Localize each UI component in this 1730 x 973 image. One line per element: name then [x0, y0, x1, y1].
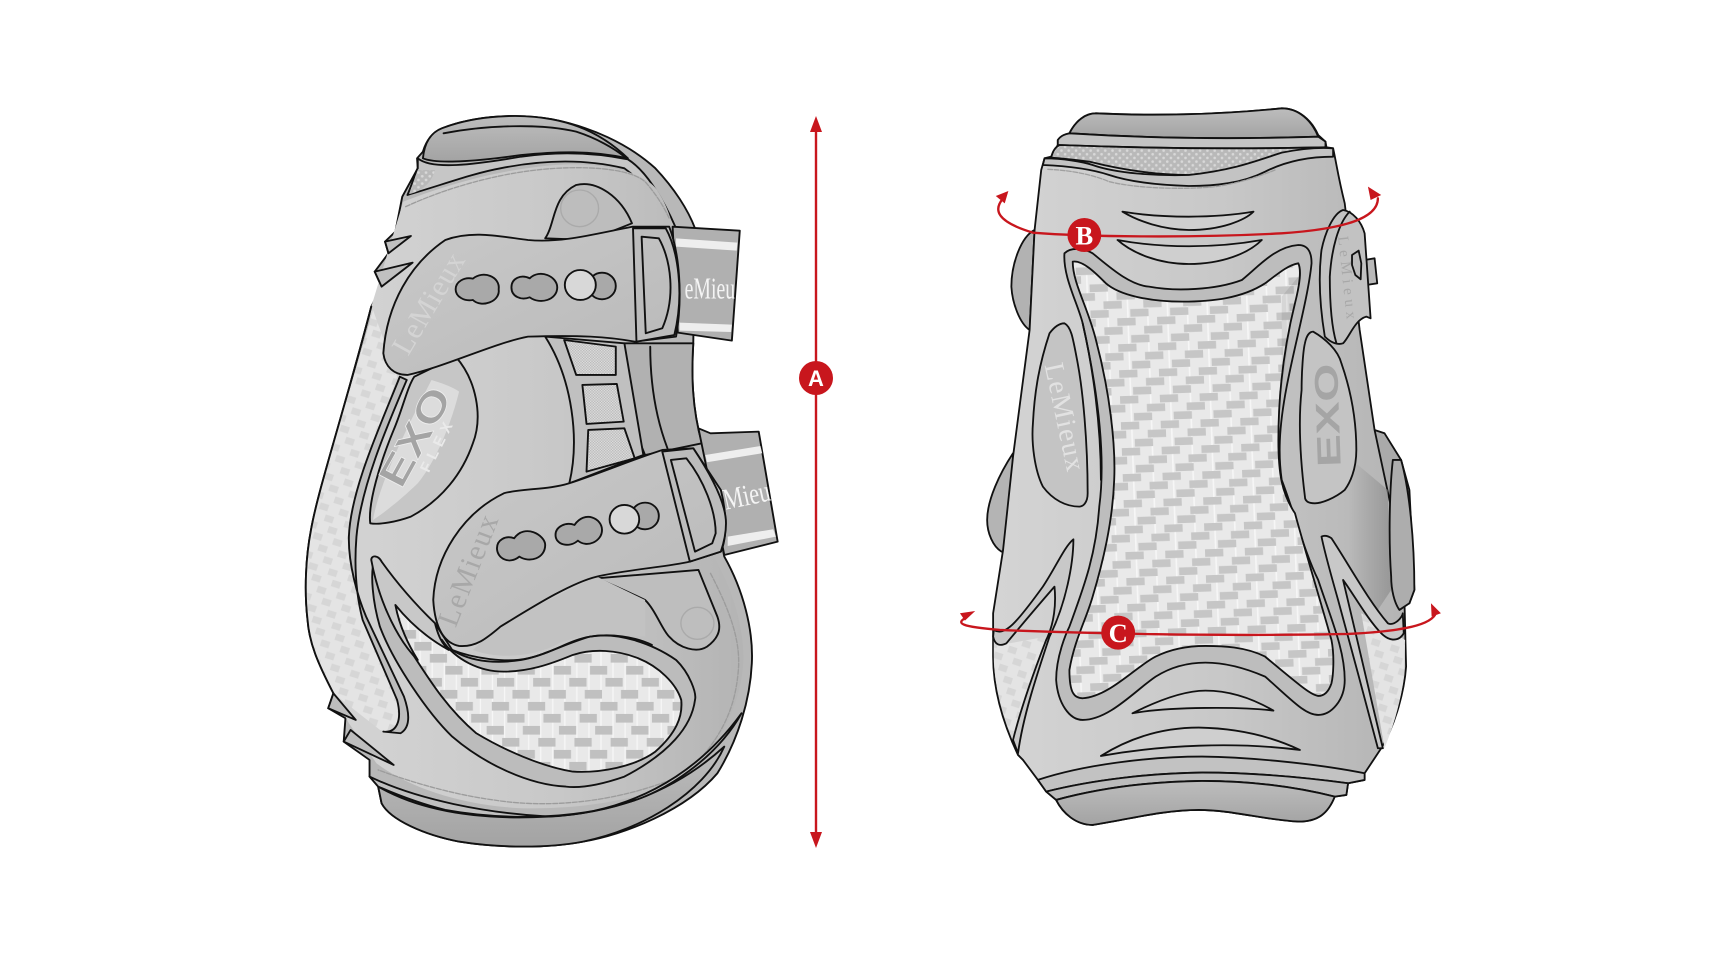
boot silhouette — [993, 108, 1406, 825]
right wing — [1322, 536, 1404, 748]
upper strap holes — [456, 270, 616, 304]
vent panel 2 — [582, 384, 624, 424]
bottom cuff — [378, 747, 724, 847]
bottom band — [370, 713, 741, 817]
lower strap brand: LeMieux — [431, 510, 506, 631]
mesh corner — [409, 170, 435, 194]
cuff band — [407, 153, 676, 228]
lower strap holes — [497, 503, 659, 560]
right boot: front view — [960, 108, 1441, 825]
EXO badge — [370, 357, 478, 524]
disc fastener — [1320, 210, 1371, 344]
left boot: side view — [306, 116, 778, 847]
upper D ring — [633, 228, 679, 342]
vent panel 1 — [564, 340, 616, 375]
bottom band 1 — [1038, 757, 1365, 792]
upper strap brand: LeMieux — [385, 247, 472, 360]
lower strap — [431, 448, 726, 646]
right lower pad — [1390, 460, 1414, 610]
brand text on upper tab: LeMieux — [673, 271, 745, 305]
side shading — [1348, 457, 1391, 610]
vent panel 3 — [587, 428, 635, 472]
main body panel — [332, 164, 743, 808]
collar band — [1043, 148, 1333, 186]
lower rivet — [681, 607, 714, 639]
top cuff — [1069, 108, 1318, 138]
right side oval — [1300, 332, 1356, 503]
bottom right carbon — [1361, 613, 1405, 748]
measure arrow A: height — [799, 116, 833, 848]
lower carbon panel band — [372, 558, 695, 787]
label C: C — [1109, 618, 1128, 648]
collar stitching — [1048, 169, 1275, 188]
upper left lump — [1011, 230, 1035, 330]
window shading — [1282, 277, 1298, 390]
brand on left oval: LeMieux — [1038, 360, 1091, 474]
upper slit 2 — [1118, 240, 1262, 264]
EXO logo text: EXO — [371, 380, 461, 494]
cuff ridge — [1058, 133, 1325, 148]
right lower lump — [1375, 430, 1414, 603]
upper slit 1 — [1122, 212, 1254, 230]
measure B: upper circumference — [996, 187, 1381, 252]
left wing — [993, 539, 1073, 753]
FLEX logo text: FLEX — [418, 420, 457, 475]
inner side lines — [349, 377, 408, 733]
right side band — [624, 343, 702, 455]
upper buckle cover — [545, 184, 632, 240]
lower D ring — [662, 448, 726, 562]
lower velcro tab — [697, 428, 778, 555]
left panel swoosh — [371, 556, 449, 660]
boot silhouette — [306, 116, 752, 847]
lower carbon weave — [395, 605, 681, 772]
bottom cuff — [1056, 781, 1335, 825]
upper strap — [383, 227, 680, 375]
disc slot — [1352, 251, 1361, 279]
vent column — [545, 337, 643, 483]
carbon side strip — [306, 310, 404, 733]
lower curve panel — [473, 577, 645, 656]
measure C: lower circumference — [960, 603, 1441, 650]
label A: A — [808, 366, 824, 391]
lower slit 2 — [1101, 728, 1300, 756]
lower stitching — [378, 573, 739, 804]
upper rivet — [561, 190, 599, 227]
top cuff — [423, 116, 628, 162]
lower darts — [328, 693, 394, 765]
lower buckle cover — [597, 570, 719, 650]
disc fastener backing tab — [1365, 258, 1377, 285]
carbon window weave — [1069, 262, 1333, 698]
label B: B — [1075, 220, 1093, 250]
mesh band — [1051, 145, 1325, 175]
disc brand: LeMieux — [1334, 235, 1360, 320]
upper velcro tab — [673, 227, 745, 341]
upper darts — [375, 236, 413, 287]
left side oval — [1033, 323, 1091, 507]
brand text on lower tab: LeMieu — [697, 474, 773, 521]
carbon window band — [1056, 245, 1345, 720]
bottom left carbon — [994, 637, 1046, 740]
lower left lump — [987, 453, 1013, 552]
EXO on right oval: EXO — [1308, 363, 1349, 468]
lower slit 1 — [1132, 691, 1273, 713]
bottom band 2 — [1046, 773, 1348, 800]
upper stitching — [406, 168, 669, 218]
